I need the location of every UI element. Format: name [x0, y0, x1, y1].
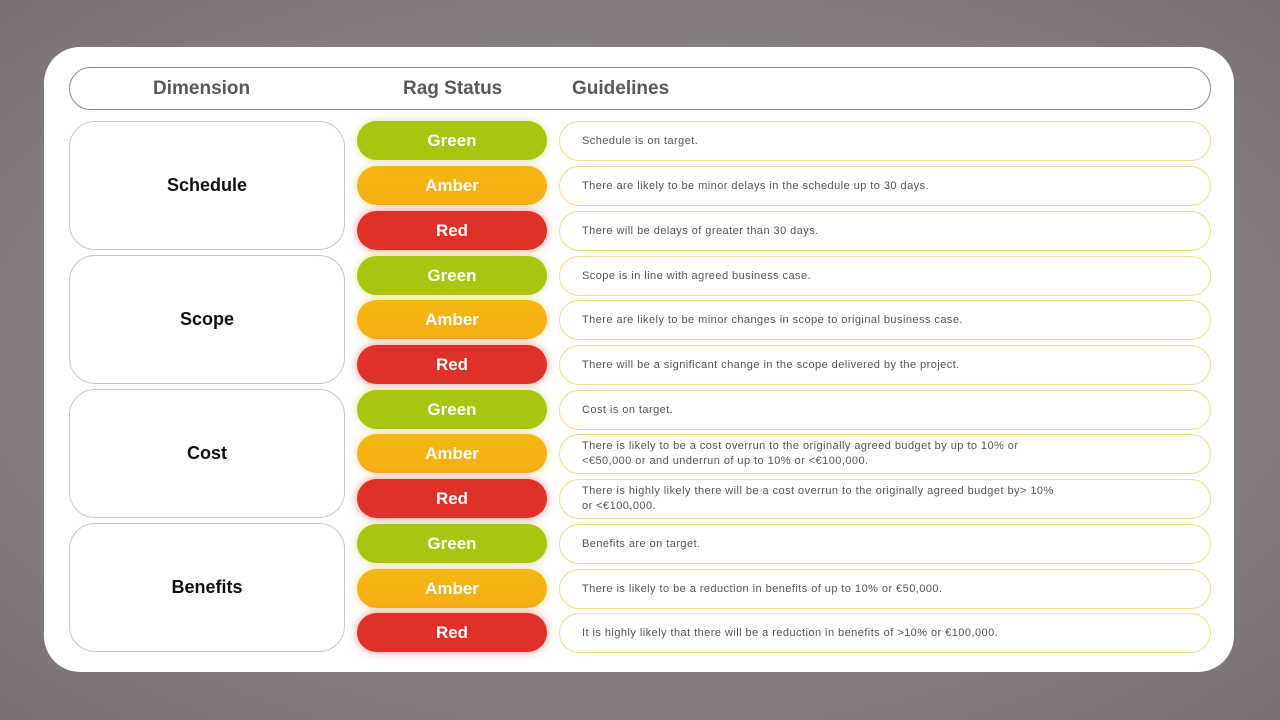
dimension: Cost: Cost	[187, 443, 227, 463]
guideline	[559, 569, 1211, 609]
guideline	[559, 479, 1211, 519]
pill red: Red	[436, 488, 468, 508]
header bar: Rag Status	[403, 78, 502, 99]
pill amber	[357, 569, 547, 608]
pill amber	[357, 434, 547, 473]
guideline: There is likely to be a cost overrun to the originally agreed budget by up to 10% or	[582, 440, 1018, 452]
dimension: Schedule: Schedule	[167, 175, 247, 195]
guideline: Benefits are on target.	[582, 538, 701, 550]
pill amber	[357, 300, 547, 339]
pill amber	[357, 166, 547, 205]
dimension: Cost	[69, 389, 345, 518]
pill green	[357, 524, 547, 563]
guideline: There are likely to be minor delays in the schedule up to 30 days.	[582, 180, 929, 192]
header bar: Dimension	[153, 78, 250, 99]
guideline: It is highly likely that there will be a reduction in benefits of >10% or €100,000.	[582, 626, 998, 638]
dimension: Schedule	[69, 121, 345, 250]
guideline: There is likely to be a reduction in benefits of up to 10% or €50,000.	[582, 582, 942, 594]
pill red	[357, 479, 547, 518]
pill red: Red	[436, 354, 468, 374]
guideline	[559, 211, 1211, 251]
pill green	[357, 121, 547, 160]
pill red	[357, 345, 547, 384]
header bar	[69, 67, 1211, 110]
guideline: There is highly likely there will be a cost overrun to the originally agreed budget by> 10%	[582, 485, 1054, 497]
pill green	[357, 390, 547, 429]
pill amber: Amber	[425, 176, 479, 194]
guideline	[559, 434, 1211, 474]
dimension: Benefits	[69, 523, 345, 652]
guideline	[559, 390, 1211, 430]
guideline	[559, 256, 1211, 296]
guideline: Scope is in line with agreed business case.	[582, 270, 811, 282]
pill amber: Amber	[425, 310, 479, 328]
header bar: Guidelines	[572, 78, 669, 99]
guideline	[559, 121, 1211, 161]
guideline: There are likely to be minor changes in scope to original business case.	[582, 314, 963, 326]
guideline: Cost is on target.	[582, 404, 673, 416]
pill red	[357, 613, 547, 652]
pill green: Green	[427, 534, 477, 552]
dimension: Scope	[69, 255, 345, 384]
pill red: Red	[436, 220, 468, 240]
pill red: Red	[436, 622, 468, 642]
guideline	[559, 613, 1211, 653]
pill green: Green	[427, 266, 477, 284]
guideline: There will be a significant change in the scope delivered by the project.	[582, 358, 960, 370]
pill amber: Amber	[425, 444, 479, 462]
dimension: Benefits: Benefits	[171, 577, 242, 597]
guideline	[559, 345, 1211, 385]
pill green: Green	[427, 130, 477, 150]
guideline	[559, 524, 1211, 564]
dimension: Scope: Scope	[180, 309, 234, 329]
guideline: There will be delays of greater than 30 days.	[582, 224, 819, 236]
pill green: Green	[427, 400, 477, 418]
guideline: <€50,000 or and underrun of up to 10% or <€100,000.	[582, 455, 869, 467]
pill green	[357, 256, 547, 295]
pill red	[357, 211, 547, 250]
guideline	[559, 166, 1211, 206]
guideline: Schedule is on target.	[582, 134, 698, 146]
guideline	[559, 300, 1211, 340]
pill amber: Amber	[425, 578, 479, 598]
guideline: or <€100,000.	[582, 500, 656, 512]
